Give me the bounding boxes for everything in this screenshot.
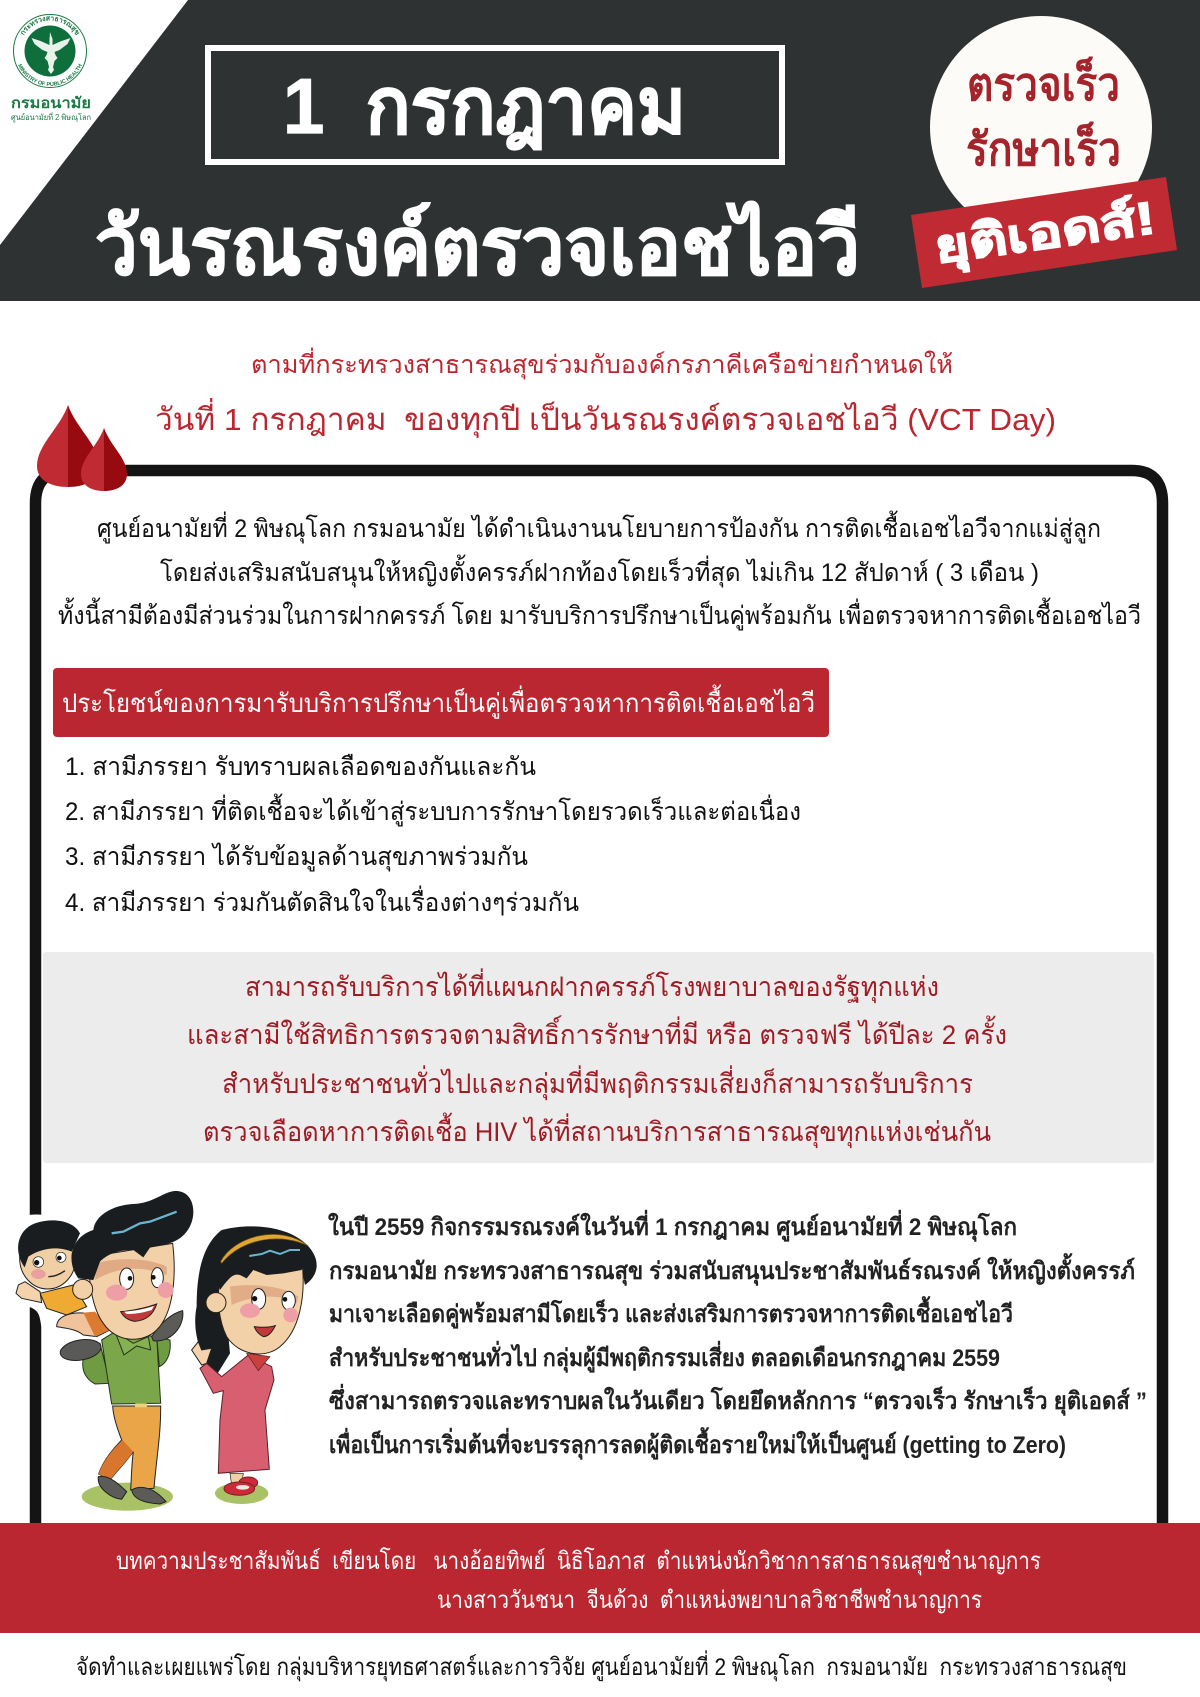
list: benefits: 1. สามีภรรยา รับทราบผลเลือดของกันและกัน: [65, 753, 536, 781]
logo: department of health: กรมอนามัย: [11, 95, 91, 112]
badge banner: stop AIDS: ยุติเอดส์!: [931, 191, 1159, 276]
paragraph: policy: ทั้งนี้สามีต้องมีส่วนร่วมในการฝากครรภ์ โดย มารับบริการปรึกษาเป็นคู่พร้อมกัน เพื่อตรวจหาการติดเชื้อเอชไอวี: [58, 597, 1141, 631]
title: HIV testing campaign day: วันรณรงค์ตรวจเอชไอวี: [95, 200, 860, 291]
paragraph: 2016 campaign: เพื่อเป็นการเริ่มต้นที่จะบรรลุการลดผู้ติดเชื้อรายใหม่ให้เป็นศูนย์ (getting to Zero): [329, 1426, 1066, 1461]
footer band: authors: นางสาววันชนา จีนด้วง ตำแหน่งพยาบาลวิชาชีพชำนาญการ: [437, 1587, 982, 1614]
panel: where to get service: และสามีใช้สิทธิการตรวจตามสิทธิ์การรักษาที่มี หรือ ตรวจฟรี ได้ปีละ 2 ครั้ง: [187, 1015, 1007, 1050]
footer band: authors: [0, 1523, 1200, 1633]
list: benefits: 3. สามีภรรยา ได้รับข้อมูลด้านสุขภาพร่วมกัน: [65, 842, 528, 872]
intro line 2: วันที่ 1 กรกฎาคม ของทุกปี เป็นวันรณรงค์ตรวจเอชไอวี (VCT Day): [155, 398, 1056, 439]
intro line 1: ตามที่กระทรวงสาธารณสุขร่วมกับองค์กรภาคีเครือข่ายกำหนดให้: [251, 347, 953, 380]
child head: [20, 1228, 76, 1289]
heading: benefits of couple counselling: ประโยชน์ของการมารับบริการปรึกษาเป็นคู่เพื่อตรวจหาการติดเชื้อเอชไอวี: [62, 684, 815, 719]
list: benefits: [65, 753, 801, 917]
paragraph: 2016 campaign: มาเจาะเลือดคู่พร้อมสามีโดยเร็ว และส่งเสริมการตรวจหาการติดเชื้อเอชไอวี: [329, 1295, 1013, 1329]
man head: [89, 1243, 174, 1339]
heading: benefits of couple counselling: [53, 668, 829, 737]
paragraph: policy: โดยส่งเสริมสนับสนุนให้หญิงตั้งครรภ์ฝากท้องโดยเร็วที่สุด ไม่เกิน 12 สัปดาห์ ( 3 เดือน ): [160, 554, 1039, 588]
logo: department of health: [11, 14, 91, 123]
badge circle: test early treat early: [930, 16, 1152, 238]
child body: [40, 1285, 87, 1315]
woman shoes: [230, 1473, 243, 1485]
icon: blood drops: [37, 405, 127, 491]
panel: where to get service: ตรวจเลือดหาการติดเชื้อ HIV ได้ที่สถานบริการสาธารณสุขทุกแห่งเช่นกัน: [203, 1112, 991, 1149]
footer band: authors: บทความประชาสัมพันธ์ เขียนโดย นางอ้อยทิพย์ นิธิโอภาส ตำแหน่งนักวิชาการสาธารณสุขชำนาญการ: [116, 1547, 1041, 1576]
badge circle: test early treat early: ตรวจเร็ว: [967, 56, 1120, 110]
woman head: [218, 1267, 303, 1354]
list: benefits: 4. สามีภรรยา ร่วมกันตัดสินใจในเรื่องต่างๆร่วมกัน: [65, 885, 579, 917]
header band: [0, 0, 1200, 301]
logo: department of health: กระทรวงสาธารณสุข: [21, 16, 80, 36]
panel: where to get service: [43, 952, 1154, 1163]
badge banner: stop AIDS: [911, 177, 1177, 288]
panel: where to get service: สามารถรับบริการได้ที่แผนกฝากครรภ์โรงพยาบาลของรัฐทุกแห่ง: [245, 968, 939, 1004]
woman hair: [195, 1226, 317, 1375]
paragraph: 2016 campaign: [328, 1209, 1147, 1461]
title box: 1 July: 1 กรกฎาคม: [283, 62, 686, 150]
badge circle: test early treat early: รักษาเร็ว: [966, 121, 1121, 175]
paragraph: 2016 campaign: ในปี 2559 กิจกรรมรณรงค์ในวันที่ 1 กรกฎาคม ศูนย์อนามัยที่ 2 พิษณุโลก: [328, 1209, 1017, 1243]
man back arms: [83, 1343, 110, 1384]
man shirt: [102, 1332, 161, 1404]
grass: [82, 1483, 173, 1511]
paragraph: policy: [58, 510, 1141, 631]
logo: department of health: ศูนย์อนามัยที่ 2 พิษณุโลก: [11, 111, 91, 123]
title box: 1 July: [208, 48, 782, 162]
logo: department of health: MINISTRY OF PUBLIC HEALTH: [18, 64, 82, 86]
illustration: family: [14, 1191, 317, 1511]
white cutout around child: [14, 1215, 93, 1337]
woman dress: [192, 1342, 212, 1365]
panel: where to get service: สำหรับประชาชนทั่วไปและกลุ่มที่มีพฤติกรรมเสี่ยงก็สามารถรับบริการ: [222, 1065, 973, 1101]
paragraph: 2016 campaign: กรมอนามัย กระทรวงสาธารณสุข ร่วมสนับสนุนประชาสัมพันธ์รณรงค์ ให้หญิงตั้งครรภ์: [329, 1252, 1135, 1287]
paragraph: 2016 campaign: ซึ่งสามารถตรวจและทราบผลในวันเดียว โดยยึดหลักการ “ตรวจเร็ว รักษาเร็ว ยุติเอดส์ ”: [329, 1383, 1147, 1417]
man trousers: [99, 1406, 161, 1490]
man shoes: [98, 1476, 127, 1499]
paragraph: 2016 campaign: สำหรับประชาชนทั่วไป กลุ่มผู้มีพฤติกรรมเสี่ยง ตลอดเดือนกรกฎาคม 2559: [329, 1340, 1000, 1374]
paragraph: policy: ศูนย์อนามัยที่ 2 พิษณุโลก กรมอนามัย ได้ดำเนินงานนโยบายการป้องกัน การติดเชื้อเอชไอวีจากแม่สู่ลูก: [97, 510, 1101, 544]
main card outline: [36, 470, 1162, 1523]
list: benefits: 2. สามีภรรยา ที่ติดเชื้อจะได้เข้าสู่ระบบการรักษาโดยรวดเร็วและต่อเนื่อง: [65, 793, 801, 827]
